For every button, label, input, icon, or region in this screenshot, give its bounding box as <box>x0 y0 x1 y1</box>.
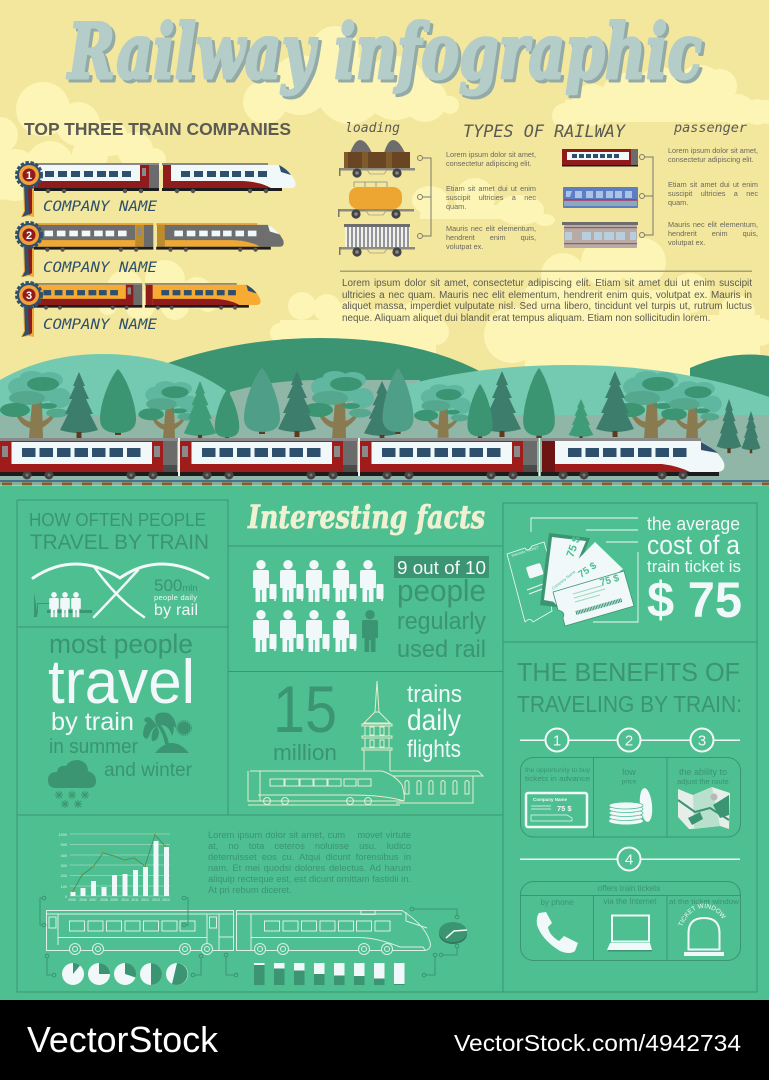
text: chart paragraph: Lorem ipsum dolor sit amet, cum movet virtute <box>208 830 411 840</box>
charts: pies <box>62 963 188 985</box>
chart: bars and line: 2009 <box>110 898 118 902</box>
stat: 15 million: 15 <box>273 672 337 746</box>
box: benefits 1-3 <box>520 758 740 837</box>
timeline: steps 1 to 3: 3 <box>698 732 706 750</box>
chart: bars and line: 2014 <box>162 898 170 902</box>
chart: bars and line: 2007 <box>89 898 97 902</box>
heading: benefits: TRAVELING BY TRAIN: <box>517 691 742 717</box>
text: railway paragraph: aliquet massa, imperdiet vulputate nisl. Sed urna libero, tincidunt vel turpis ut, rutrum luctus <box>342 301 752 312</box>
connector: loading wagons <box>418 156 431 238</box>
train <box>0 438 724 480</box>
icon: train outline diagram <box>46 910 430 954</box>
connector lines: ticket <box>531 518 638 622</box>
benefit: buy in advance <box>525 767 591 827</box>
panel: ticket cost <box>507 514 742 628</box>
text: trains daily flights <box>407 681 462 763</box>
trees <box>0 368 760 453</box>
text: average cost: train ticket is <box>647 558 741 576</box>
chart: bars and line: 1000 <box>59 833 67 837</box>
icon: palm island <box>143 713 192 753</box>
stat: 15 million: million <box>273 740 337 765</box>
text: chart paragraph <box>208 830 411 900</box>
text: average cost <box>647 514 742 628</box>
text: most people travel: by train <box>51 708 134 736</box>
chart: bars and line: 200 <box>61 874 67 878</box>
icon: bridge <box>33 564 208 617</box>
text: passenger description 2: Etiam sit amet dui ut enim <box>668 180 758 189</box>
benefit: buy in advance: the opportunity to buy <box>525 767 591 774</box>
option: at the ticket window: at the ticket window <box>669 897 740 906</box>
benefit: low price: low <box>622 767 636 777</box>
panel: 9 out of 10 <box>253 556 489 663</box>
text: passenger description 3 <box>668 220 758 248</box>
option: by phone <box>537 898 578 953</box>
text: loading description 2: suscipit ultricies a nec <box>446 193 536 202</box>
panel: 15 million trains <box>248 672 483 805</box>
timeline: step 4: 4 <box>625 852 633 868</box>
panel: how often people travel by train <box>29 510 209 619</box>
benefit: adjust the route: the ability to <box>679 767 727 777</box>
train 2 with medal <box>17 223 284 277</box>
text: passenger description 1: consectetur adipiscing elit. <box>668 155 754 164</box>
icon: tickets: RAILWAY TICKET <box>511 545 540 558</box>
connector: passenger coaches <box>640 154 653 238</box>
train 3 with medal: 3 <box>26 290 32 302</box>
option: at the ticket window <box>669 897 740 956</box>
label: passenger: passenger <box>673 120 748 136</box>
stat: 500 mln by rail: 500mln <box>154 576 198 595</box>
option: by phone: by phone <box>541 898 574 907</box>
heading: types of railway: TYPES OF RAILWAY <box>463 122 627 142</box>
footer band <box>0 1000 769 1080</box>
benefit: low price <box>609 767 654 824</box>
text: passenger description 1 <box>668 146 758 166</box>
train 2 with medal: 2 <box>26 230 32 242</box>
sky background <box>0 0 769 486</box>
text: loading description 3 <box>446 224 536 252</box>
heading: how often: TRAVEL BY TRAIN <box>30 531 209 554</box>
panel: top three train companies <box>17 119 296 337</box>
text: trains daily flights: daily <box>407 704 461 737</box>
label: loading: loading <box>345 120 400 136</box>
chart: bars and line: 2013 <box>152 898 160 902</box>
icon: station with tower and train <box>248 681 483 805</box>
text: average cost: $ 75 <box>647 572 742 628</box>
chart: bars and line: 100 <box>61 885 67 889</box>
text: people regularly used rail: regularly <box>397 608 486 635</box>
icon: coal wagon <box>339 140 415 178</box>
chart: bars and line: 2006 <box>79 898 87 902</box>
benefit: buy in advance: tickets in advance <box>525 774 590 783</box>
timeline: step 4 <box>520 848 740 870</box>
text: railway paragraph <box>342 278 752 328</box>
text: passenger description 3: Mauris nec elit elementum, <box>668 220 758 229</box>
chart: bars and line: 2005 <box>68 898 76 902</box>
panel: most people travel <box>48 629 195 808</box>
chart: bars and line: 2012 <box>141 898 149 902</box>
charts: stacked bars <box>254 963 404 985</box>
text: loading description 2: quam. <box>446 202 466 211</box>
text: most people travel: most people <box>49 629 193 659</box>
text: chart paragraph: nam. Et mei quodsi dolores delectus. Ad harum <box>208 863 411 873</box>
benefit: adjust the route: adjust the route <box>677 777 729 786</box>
chart: 3d pie <box>439 922 467 944</box>
icon: red passenger coach <box>562 149 638 166</box>
panel: types of railway <box>338 120 758 328</box>
text: chart paragraph: aliquip recteque est, est dicunt omittam fastidii in. <box>208 874 411 884</box>
timeline: steps 1 to 3: 1 <box>553 732 561 750</box>
stat: 500 mln by rail <box>154 576 198 619</box>
connectors: diagram <box>40 896 459 977</box>
text: loading description 1 <box>446 150 536 170</box>
train 3 with medal: COMPANY NAME <box>43 317 157 333</box>
heading: benefits <box>517 657 742 717</box>
icon: tickets: 75 $ <box>599 573 621 589</box>
chart: bars and line: 2008 <box>100 898 108 902</box>
stat badge: 9 out of 10: 9 out of 10 <box>397 558 486 578</box>
text: people regularly used rail: people <box>397 573 486 608</box>
text: chart paragraph: At pri rebum diceret. <box>208 885 292 895</box>
train 1 with medal <box>17 163 296 217</box>
stat: 500 mln by rail: by rail <box>154 602 198 619</box>
text: average cost: the average <box>647 514 740 534</box>
chart: bars and line: 400 <box>61 854 67 858</box>
train 2 with medal: COMPANY NAME <box>43 260 157 276</box>
text: people regularly used rail <box>397 573 486 663</box>
chart: bars and line: 300 <box>61 864 67 868</box>
icon: waiting passengers <box>34 592 92 617</box>
text: loading description 3: volutpat ex. <box>446 242 483 251</box>
text: railway paragraph: Lorem ipsum dolor sit amet, consectetur adipiscing elit. Etiam sit amet dui ut enim suscipit <box>342 278 752 289</box>
text: passenger description 2 <box>668 180 758 208</box>
footer logo: VectorStock <box>27 1019 219 1060</box>
option: at the ticket window: TICKET WINDOW <box>678 903 726 926</box>
panel: statistics and train diagram <box>40 830 467 985</box>
icon: tickets: 75 $ <box>577 560 599 580</box>
heading: interesting facts: Interesting facts <box>247 498 485 536</box>
text: loading description 1: Lorem ipsum dolor sit amet, <box>446 150 536 159</box>
stat: 500 mln by rail: people daily <box>154 593 197 602</box>
chart: bars and line: 2010 <box>121 898 129 902</box>
heading: how often: HOW OFTEN PEOPLE <box>29 510 206 530</box>
text: most people travel <box>48 629 195 781</box>
benefit: buy in advance: 75 $ <box>557 804 572 813</box>
icon: snow cloud <box>48 760 96 808</box>
text: most people travel: and winter <box>104 759 192 781</box>
benefit: low price: price <box>622 778 637 786</box>
icon: hopper wagon <box>339 224 415 257</box>
text: most people travel: in summer <box>49 736 138 758</box>
text: loading description 3: Mauris nec elit elementum, <box>446 224 536 233</box>
icon: people grid <box>253 560 384 652</box>
clouds <box>0 26 769 380</box>
track <box>0 480 769 486</box>
panel: benefits of traveling by train <box>517 657 742 961</box>
text: trains daily flights: trains <box>407 681 462 708</box>
icon: blue passenger coach <box>563 187 638 208</box>
text: passenger description 2: quam. <box>668 198 688 207</box>
footer url: VectorStock.com/4942734 <box>454 1030 741 1056</box>
text: passenger description 2: suscipit ultricies a nec <box>668 189 758 198</box>
chart: bars and line <box>59 833 170 902</box>
train 1 with medal: COMPANY NAME <box>43 199 157 215</box>
text: passenger description 3: volutpat ex. <box>668 238 705 247</box>
text: passenger description 3: hendrerit enim quis, <box>668 229 758 238</box>
chart: bars and line: 0 <box>65 895 67 899</box>
train 1 with medal: 1 <box>26 170 32 182</box>
chart: bars and line: 2011 <box>131 898 139 902</box>
heading: benefits: THE BENEFITS OF <box>517 657 740 687</box>
train 3 with medal <box>17 283 261 337</box>
text: loading description 3: hendrerit enim quis, <box>446 233 536 242</box>
icon: tickets <box>507 533 634 626</box>
icon: grey passenger coach <box>562 222 638 248</box>
text: chart paragraph: deterruisset eos cu. Atqui dicunt forensibus in <box>208 852 411 862</box>
text: loading description 1: consectetur adipiscing elit. <box>446 159 532 168</box>
icon: tank wagon <box>338 182 414 219</box>
text: average cost: cost of a <box>647 530 741 560</box>
green background <box>0 486 769 1000</box>
landscape scene <box>0 338 769 486</box>
heading: how often <box>29 510 209 554</box>
text: loading description 2 <box>446 184 536 212</box>
text: people regularly used rail: used rail <box>397 636 486 663</box>
text: railway paragraph: ultricies a nec quam. Mauris nec elit elementum, hendrerit enim quis, volutpat ex. Mauris in <box>342 290 752 301</box>
option: via the internet <box>604 897 657 952</box>
timeline: steps 1 to 3 <box>520 728 740 752</box>
option: via the internet: via the Internet <box>604 897 657 906</box>
text: chart paragraph: at, no tota ceteros noluisse usu. ludico <box>208 841 411 851</box>
heading: top three: TOP THREE TRAIN COMPANIES <box>24 119 291 139</box>
box: offers train tickets <box>520 881 741 961</box>
icon: tickets: Company Name <box>551 569 577 591</box>
timeline: steps 1 to 3: 2 <box>625 732 633 750</box>
hills <box>0 338 769 481</box>
text: railway paragraph: neque. Aliquam aliquet dui blandit erat tempus aliquam. Etiam non sollicitudin lorem. <box>342 313 710 324</box>
text: most people travel: travel <box>48 648 195 717</box>
text: passenger description 1: Lorem ipsum dolor sit amet, <box>668 146 758 155</box>
benefit: adjust the route <box>677 767 730 829</box>
benefit: buy in advance: Company Name <box>533 797 568 802</box>
text: loading description 2: Etiam sit amet dui ut enim <box>446 184 536 193</box>
text: trains daily flights: flights <box>407 736 461 763</box>
box: offers train tickets: offers train tickets <box>598 884 660 893</box>
chart: bars and line: 500 <box>61 843 67 847</box>
icon: tickets: 75 $ <box>565 535 583 559</box>
